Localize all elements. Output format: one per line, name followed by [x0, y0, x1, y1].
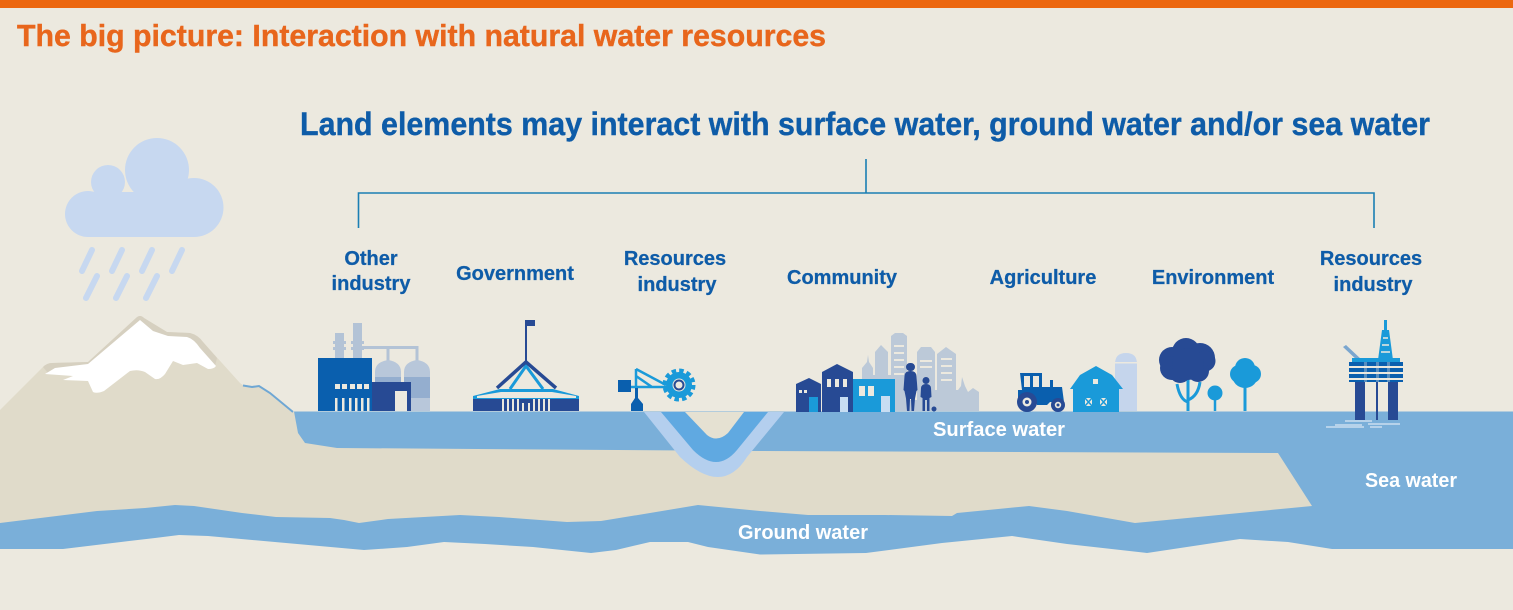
cloud: [65, 138, 224, 237]
bracket connector: [358, 159, 1374, 228]
label: other industry: industry: [332, 273, 411, 295]
icon: trees: [1159, 338, 1261, 411]
water body: surface, sea and ground water: [0, 412, 1513, 554]
medium tree: [1244, 376, 1246, 411]
label: offshore resources industry: Resources: [1320, 248, 1422, 270]
icon: excavator: [618, 369, 694, 411]
icon: offshore oil rig: [1326, 320, 1403, 427]
top orange bar: [0, 0, 1513, 8]
woman: [904, 363, 918, 411]
river running off the mountain: [243, 386, 293, 412]
mountain snow cap: [45, 320, 216, 393]
label: surface water: Surface water: [933, 419, 1065, 441]
label: government: Government: [456, 263, 574, 285]
navy house right: [822, 364, 853, 412]
icon: barn and silo: [1070, 353, 1137, 412]
label: resources industry: Resources: [624, 248, 726, 270]
icon: factory: [318, 323, 430, 411]
label: agriculture: Agriculture: [990, 267, 1096, 289]
mountain ridge shading: [43, 316, 217, 375]
label: resources industry: industry: [638, 274, 717, 296]
title: The big picture: Interaction with natural water resources: [17, 18, 826, 53]
city skyline: [862, 333, 979, 411]
icon: parliament house: [473, 320, 579, 411]
cloud and rain: [65, 138, 224, 298]
ball: [932, 406, 936, 412]
child: [920, 377, 932, 411]
label: environment: Environment: [1152, 267, 1274, 289]
label: ground water: Ground water: [738, 522, 868, 544]
large tree: [1177, 376, 1200, 411]
label: community: Community: [787, 267, 898, 289]
cyan building: [853, 379, 895, 412]
rain: [82, 250, 182, 298]
icon: community buildings and people: [796, 333, 979, 412]
water ripples: [1326, 421, 1400, 427]
mining pit: [644, 412, 784, 477]
navy house left: [796, 378, 821, 412]
label: offshore resources industry: industry: [1334, 274, 1413, 296]
heading: Land elements may interact with surface water, ground water and/or sea water: [300, 106, 1430, 142]
label: sea water: Sea water: [1365, 470, 1457, 492]
label: other industry: Other: [344, 248, 398, 270]
icon: tractor: [1017, 373, 1065, 412]
small tree: [1214, 394, 1216, 411]
land and mountain: [0, 316, 1320, 530]
